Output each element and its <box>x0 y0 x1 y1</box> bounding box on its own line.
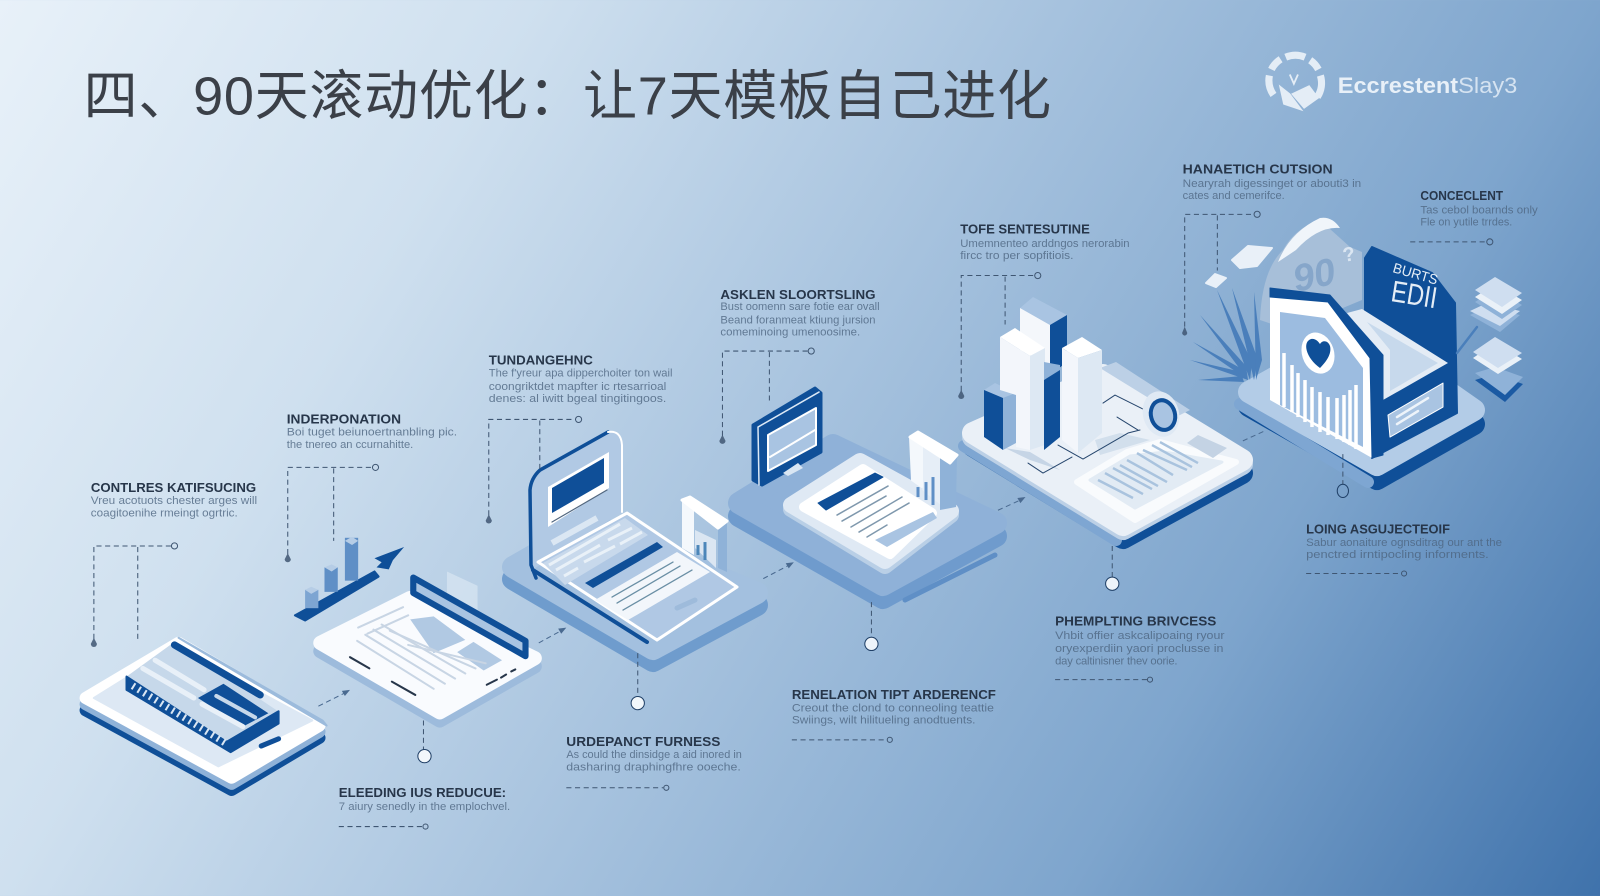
arrow head <box>374 547 404 569</box>
document <box>1077 442 1236 520</box>
box interior <box>1347 309 1448 400</box>
palm leaves <box>1190 288 1262 382</box>
logo wordmark <box>1338 73 1517 98</box>
keyboard deck <box>538 513 737 640</box>
barcode ticks <box>1284 353 1356 449</box>
callout 10: RENELATION TIPT ARDERENCF <box>792 687 996 702</box>
callout 6: cates and cemerifce. <box>1183 190 1285 202</box>
callout 6: HANAETICH CUTSION <box>1183 162 1333 177</box>
edit text: BURTS <box>1391 260 1440 288</box>
callout 10: Swiings, wilt hilitueling anodtuents. <box>792 715 976 727</box>
callout 4 <box>719 287 880 444</box>
callout 9: Vhbit offier askcalipoaing ryour <box>1055 630 1225 642</box>
callout 9: day caltinisner thev oorie. <box>1055 655 1178 667</box>
small block <box>984 383 1016 398</box>
chart tower <box>682 497 727 572</box>
callout 11: As could the dinsidge a aid inored in <box>566 749 742 761</box>
callout 2: Boi tuget beiunoertnanbling pic. <box>287 427 457 439</box>
callout 12 <box>339 720 510 829</box>
callout 9: PHEMPLTING BRIVCESS <box>1055 614 1216 629</box>
towers <box>1020 297 1067 325</box>
edit text: EDII <box>1389 275 1440 315</box>
callout 4: Bust oomenn sare fotie ear ovall <box>720 301 880 313</box>
monitor <box>753 388 821 485</box>
90 dial: ? <box>1341 243 1357 267</box>
tower shadow <box>1005 448 1060 470</box>
callout 1: upper-left text: Vreu acotuots chester arges will <box>91 495 257 507</box>
callout 9: oryexperdiin yaori proclusse in <box>1055 643 1223 655</box>
callout 5 <box>958 222 1130 399</box>
callout 2: the tnereo an ccurnahitte. <box>287 439 413 451</box>
box label <box>1388 383 1443 437</box>
callout 9 <box>1055 546 1225 682</box>
tablet document <box>791 463 951 566</box>
callout 12: 7 aiury senedly in the emplochvel. <box>339 801 510 813</box>
callout 8: LOING ASGUJECTEOIF <box>1306 522 1450 537</box>
callout 7: Fle on yutile trrdes. <box>1420 217 1512 229</box>
dark top bar <box>413 578 526 656</box>
callout 3: TUNDANGEHNC <box>489 352 593 367</box>
magnifier <box>1138 387 1184 441</box>
callout 11: dasharing draphingfhre ooeche. <box>566 761 741 773</box>
dark rim <box>1270 288 1383 458</box>
logo <box>1269 55 1517 110</box>
blue block on document <box>875 512 937 547</box>
deck shadow edge <box>533 570 647 642</box>
callout 8: penctred irntipocling informents. <box>1306 549 1489 561</box>
callout 8: Sabur aonaiture ognsditrag our ant the <box>1306 537 1502 549</box>
front white panel <box>1270 295 1372 458</box>
callout 3 <box>486 352 672 524</box>
callout 6: Nearyrah digessinget or abouti3 in <box>1183 178 1361 190</box>
step 3: laptop <box>513 432 757 661</box>
heart badge <box>1296 328 1340 378</box>
connector arrows between steps <box>318 431 1265 706</box>
callout 12: ELEEDING IUS REDUCUE: <box>339 785 506 800</box>
back dark panel <box>1365 247 1457 458</box>
callout 2 <box>285 412 457 562</box>
logo wordmark: Eccrestent <box>1338 73 1459 98</box>
callout 5: fircc tro per sopfitiois. <box>960 250 1073 262</box>
callout 4: ASKLEN SLOORTSLING <box>720 287 876 302</box>
callout 4: Beand foranmeat ktiung jursion <box>720 315 876 327</box>
edit text <box>1389 260 1440 315</box>
callout 10 <box>792 602 996 742</box>
logo icon <box>1269 55 1322 110</box>
callout 3: The f'yreur apa dipperchoiter ton wail <box>489 368 672 380</box>
faint floating sheet <box>447 571 478 612</box>
callout 3: coongriktdet mapfter ic rtesarrioal <box>489 381 666 393</box>
chart tower <box>922 445 942 506</box>
callout 5: Umemnenteo arddngos nerorabin <box>960 238 1130 250</box>
callout 1: upper-left text: CONTLRES KATIFSUCING <box>91 480 256 495</box>
callout 10: Creout the clond to conneoling teattie <box>792 702 994 714</box>
title: 四、90天滚动优化：让7天模板自己进化 <box>84 66 1051 126</box>
stacked tiles <box>1470 277 1523 402</box>
callout 8 <box>1306 454 1502 576</box>
step 1: tablet <box>86 638 327 790</box>
callout 2: INDERPONATION <box>287 412 401 427</box>
step 5: city blocks plate <box>964 297 1242 540</box>
callout 4: comeminoing umenoosime. <box>720 327 860 339</box>
step 6: archive box with 90 dial <box>1190 218 1523 482</box>
callout 3: denes: al iwitt bgeal tingitingoos. <box>489 393 666 405</box>
callout 1: upper-left text: coagitoenihe rmeingt ogrtric. <box>91 507 238 519</box>
callout 11: URDEPANCT FURNESS <box>566 734 721 749</box>
callout 11 <box>566 653 742 790</box>
90 dial: 90 <box>1289 251 1339 301</box>
callout 7: Tas cebol boarnds only <box>1420 204 1538 216</box>
90 dial <box>1260 218 1362 330</box>
laptop lid <box>530 433 622 570</box>
callout 5: TOFE SENTESUTINE <box>960 222 1090 237</box>
step 4: monitor and document <box>739 388 996 600</box>
plate <box>1249 344 1474 479</box>
logo wordmark: Slay3 <box>1458 73 1517 98</box>
callout 7: CONCECLENT <box>1420 188 1503 203</box>
screen panel <box>595 552 710 620</box>
callout 7 <box>1410 188 1538 245</box>
step 2: document plate <box>320 571 535 720</box>
clouds <box>1232 246 1272 268</box>
step 2: chart and arrow <box>295 537 404 620</box>
chart lines <box>1028 395 1143 473</box>
callout 1: upper-left text <box>91 480 257 647</box>
callout 6 <box>1182 162 1361 335</box>
